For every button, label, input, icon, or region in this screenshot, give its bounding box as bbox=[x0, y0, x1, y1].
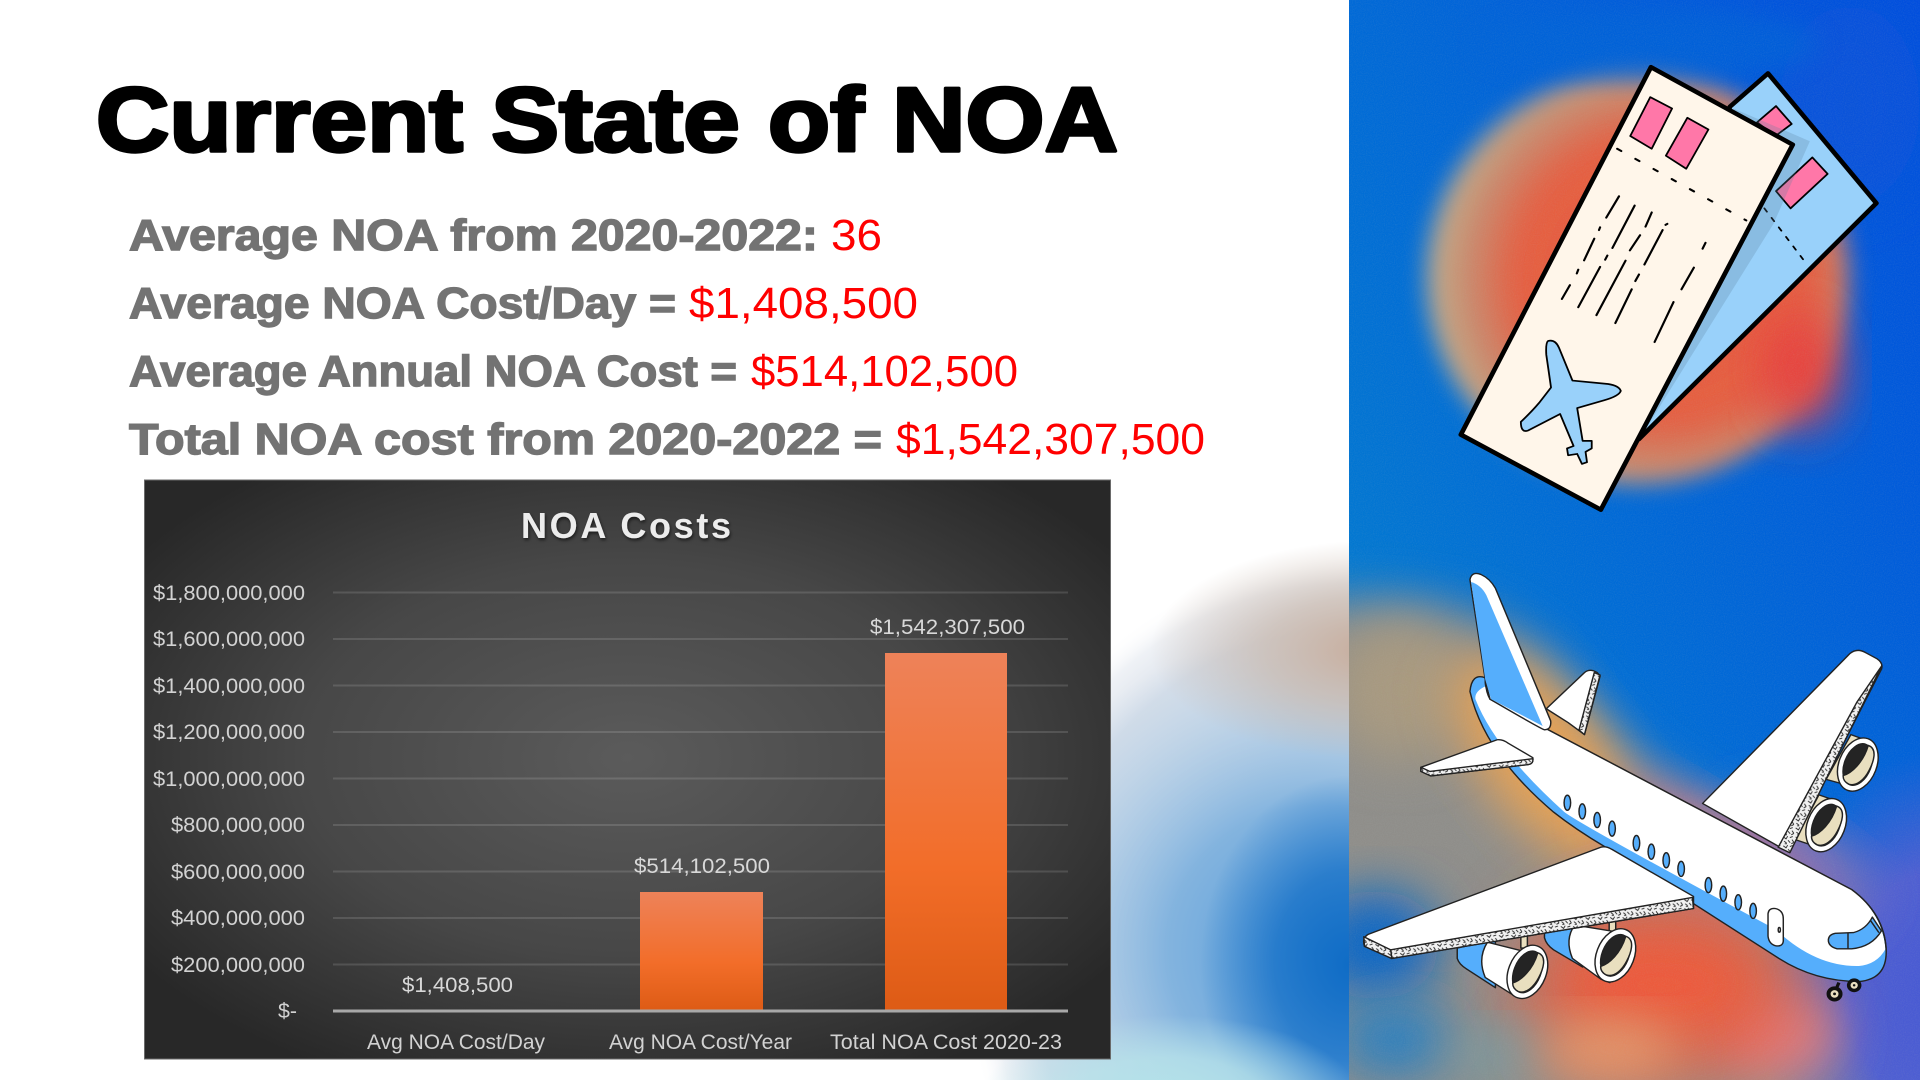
y-axis labels: $1,000,000,000 bbox=[153, 768, 305, 791]
y-axis labels: $1,800,000,000 bbox=[153, 582, 305, 605]
stat: average NOA: Average NOA from 2020-2022: bbox=[129, 211, 818, 260]
y-axis labels: $1,600,000,000 bbox=[153, 628, 305, 651]
far stabilizer bbox=[1546, 670, 1600, 735]
stat lines bbox=[129, 211, 1205, 464]
stat value: annual cost: $514,102,500 bbox=[751, 347, 1018, 396]
y-axis labels: $- bbox=[278, 1000, 297, 1023]
top blob bbox=[1427, 5, 1920, 484]
data labels: $1,408,500 bbox=[402, 974, 513, 997]
data labels: $514,102,500 bbox=[634, 855, 770, 878]
landing gear bbox=[1827, 978, 1861, 1001]
background decoration: soft gradient blob behind chart bbox=[960, 540, 1349, 1080]
near wing bbox=[1364, 847, 1694, 958]
y-axis labels: $1,200,000,000 bbox=[153, 721, 305, 744]
data labels bbox=[402, 616, 1025, 997]
stat value: 36: 36 bbox=[831, 211, 882, 260]
category labels: Total NOA Cost 2020-23 bbox=[830, 1031, 1062, 1054]
bar chart: NOA Costs bbox=[144, 480, 1110, 1059]
back ticket bbox=[1639, 73, 1876, 439]
icon: plane tickets bbox=[1461, 67, 1876, 510]
fuselage bbox=[1470, 677, 1886, 982]
category labels: Avg NOA Cost/Day bbox=[367, 1031, 545, 1054]
y-axis labels: $600,000,000 bbox=[171, 861, 305, 884]
cockpit windows bbox=[1828, 917, 1881, 949]
chart title: NOA Costs bbox=[521, 505, 731, 546]
y-axis labels: $1,400,000,000 bbox=[153, 675, 305, 698]
tail fin bbox=[1470, 573, 1551, 730]
stat: total cost: Total NOA cost from 2020-2022 = bbox=[129, 415, 882, 464]
far engines bbox=[1796, 734, 1879, 852]
y-axis labels: $200,000,000 bbox=[171, 954, 305, 977]
data labels: $1,542,307,500 bbox=[870, 616, 1025, 639]
bottom blob bbox=[1270, 601, 1920, 1080]
title: Current State of NOA bbox=[96, 70, 1118, 171]
y-axis labels bbox=[153, 582, 305, 1023]
icon: airplane bbox=[1364, 573, 1886, 1004]
near engines bbox=[1456, 922, 1636, 1000]
panel: right gradient artwork bbox=[1349, 0, 1920, 1080]
category labels bbox=[367, 1031, 1062, 1054]
far wing bbox=[1703, 650, 1882, 853]
near stabilizer bbox=[1421, 740, 1533, 776]
stat value: total cost: $1,542,307,500 bbox=[896, 415, 1205, 464]
bar: avg cost per year bbox=[640, 892, 763, 1011]
windows bbox=[1564, 795, 1756, 918]
y-axis labels: $400,000,000 bbox=[171, 907, 305, 930]
y-axis labels: $800,000,000 bbox=[171, 814, 305, 837]
stat: annual cost: Average Annual NOA Cost = bbox=[129, 347, 737, 396]
front ticket bbox=[1461, 67, 1793, 510]
stat: cost per day: Average NOA Cost/Day = bbox=[129, 279, 676, 328]
door bbox=[1768, 908, 1783, 946]
category labels: Avg NOA Cost/Year bbox=[609, 1031, 792, 1054]
stat value: cost per day: $1,408,500 bbox=[689, 279, 918, 328]
bar: total cost bbox=[885, 653, 1007, 1011]
